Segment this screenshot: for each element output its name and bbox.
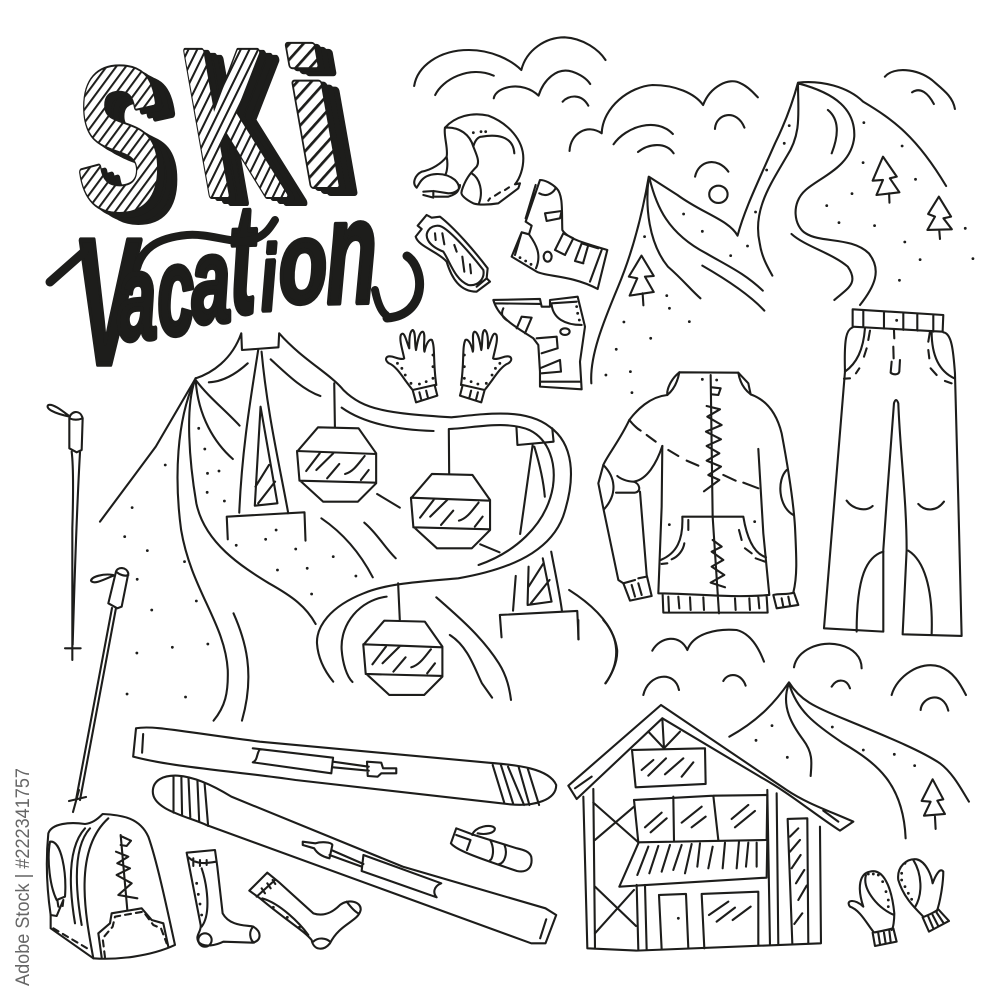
lift towers right: [500, 427, 579, 639]
title: SKI: S: [84, 32, 167, 255]
title: Vacation script: [50, 169, 420, 403]
snow dots: [125, 428, 356, 697]
icon: rolled mat: [451, 826, 532, 871]
title: SKI: i: [270, 12, 356, 227]
title: SKI: K: [176, 10, 301, 242]
panel: mountains: [414, 37, 973, 393]
icon: ski 2: [153, 776, 556, 943]
icon: pine tree: [922, 779, 945, 829]
icon: ski 1: [133, 727, 556, 805]
title: SKI: i: [275, 14, 361, 229]
icon: goggles: [416, 215, 490, 292]
icon: mitten left: [849, 871, 897, 946]
icon: sock 1: [187, 850, 260, 947]
panel: chalet and mountain: [568, 620, 969, 951]
icon: ski boot upper: [512, 180, 607, 289]
icon: ski trousers: [824, 309, 962, 636]
icon: jacket: [598, 372, 798, 613]
icon: backpack: [47, 814, 175, 959]
lift tower left: [227, 350, 306, 541]
panel: gondola lift scene: [100, 333, 617, 721]
icon: sock 2: [249, 873, 361, 949]
gondola 2: [411, 474, 490, 548]
icon: glove right: [460, 330, 511, 402]
title: SKI: i: [281, 17, 367, 232]
icon: ski boot lower: [493, 297, 585, 389]
title: SKI: K: [183, 13, 308, 245]
title: SKI: S: [97, 39, 180, 262]
title: Vacation script: a: [187, 212, 234, 350]
icon: glove left: [386, 330, 437, 402]
title: SKI: [78, 8, 373, 262]
icon: helmet: [414, 114, 523, 205]
ski poles: [48, 405, 128, 812]
mountain and cable outline: [100, 333, 617, 721]
panel: skis and mat: [133, 727, 556, 943]
title: SKI: K: [170, 8, 295, 240]
title: Vacation script: o: [276, 197, 329, 329]
icons: gloves: [386, 330, 511, 402]
stock credit: Adobe Stock | #222341757: [13, 768, 34, 986]
clouds: [578, 620, 966, 711]
title: SKI: S: [78, 28, 161, 251]
title: SKI: S: [91, 36, 174, 259]
title: Vacation script: V: [71, 202, 144, 403]
title: Vacation script: n: [325, 169, 378, 335]
title: SKI: i: [287, 19, 373, 234]
chalet: [568, 705, 853, 951]
gondola 3: [363, 583, 442, 695]
icons: helmet, goggles, boots: [414, 114, 607, 389]
title: SKI: K: [170, 8, 295, 240]
clouds: [414, 37, 955, 203]
gondola 1: [297, 383, 376, 502]
icon: pine trees: [629, 157, 952, 305]
icon: mitten right: [898, 859, 949, 932]
title: SKI: S: [78, 28, 161, 251]
title: Vacation script: c: [153, 221, 198, 362]
mountain: [729, 682, 969, 838]
mountains: [591, 82, 973, 393]
title: Vacation script: i: [259, 227, 279, 331]
title: Vacation script: t: [226, 172, 261, 347]
title: Vacation script: a: [113, 229, 160, 367]
panel: backpack and socks: [47, 814, 361, 959]
title: SKI: K: [189, 15, 314, 247]
title: SKI: i: [270, 12, 356, 227]
